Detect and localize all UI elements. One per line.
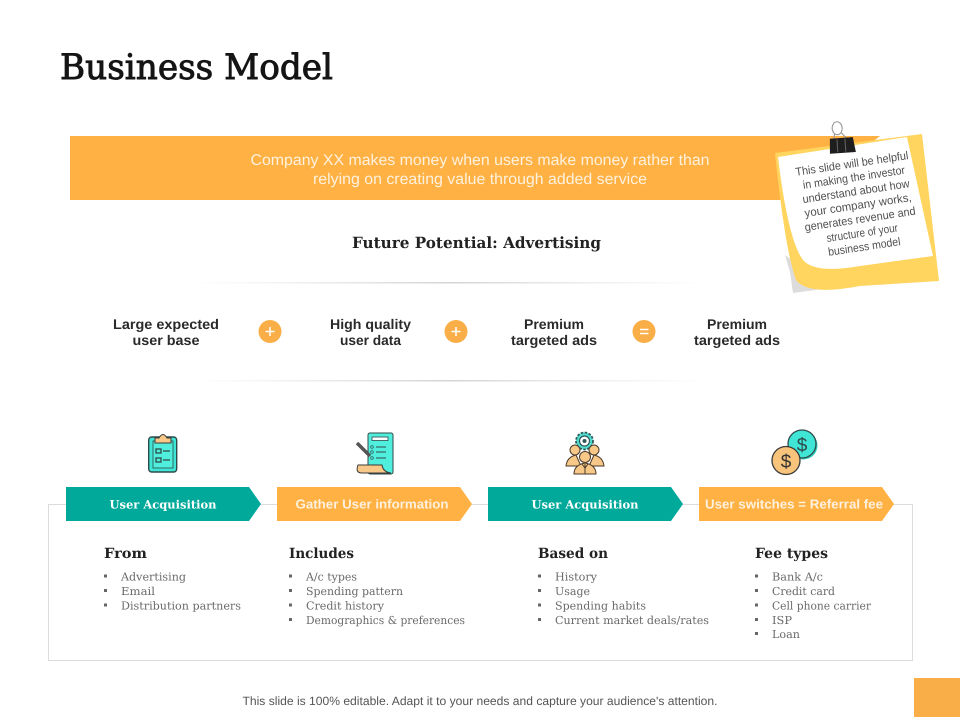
footer note: This slide is 100% editable. Adapt it to your needs and capture your audience's attention. (242, 694, 718, 708)
icon: clipboard (149, 434, 177, 472)
column: based on: Spending habits (555, 600, 646, 612)
arrow: user switches referral fee: User switches = Referral fee (705, 496, 883, 512)
column: from: Distribution partners (121, 600, 241, 612)
upper divider (190, 282, 710, 284)
icon: dollar coins (772, 430, 818, 474)
arrow: user acquisition: User Acquisition (532, 498, 639, 512)
column: based on: Usage (555, 585, 590, 598)
term: large expected user base (113, 316, 219, 348)
column: fee types: Bank A/c (772, 570, 823, 584)
column: based on: Based on (538, 546, 608, 562)
term: high quality user data: High quality (330, 316, 411, 332)
column: includes: Credit history (306, 600, 385, 612)
column: includes: Spending pattern (306, 585, 403, 598)
lower divider (190, 380, 710, 382)
column: based on: Current market deals/rates (555, 614, 709, 627)
icon: document and pen (357, 433, 393, 474)
sticky note: business model (827, 236, 901, 259)
column: includes: Demographics & preferences (306, 614, 465, 627)
sticky note: structure of your (826, 222, 899, 245)
column: fee types: Fee types (755, 546, 828, 562)
term: high quality user data (330, 316, 411, 348)
sticky note: in making the investor (802, 165, 906, 192)
column: fee types (755, 546, 872, 641)
term: result premium targeted ads: Premium (707, 316, 767, 332)
term: premium targeted ads: Premium (524, 316, 584, 332)
sticky note: understand about how (802, 178, 911, 206)
banner (70, 136, 880, 200)
column: includes: A/c types (305, 570, 357, 584)
column: from: Email (121, 585, 156, 598)
icon: dollar coins: $ (781, 452, 792, 472)
column: from: Advertising (120, 570, 186, 584)
column: fee types: Credit card (772, 585, 835, 598)
plus icon (444, 320, 468, 343)
arrow: gather user information (277, 487, 472, 521)
sticky note (775, 121, 939, 293)
arrow: user acquisition: User Acquisition (110, 498, 217, 512)
term: premium targeted ads: targeted ads (511, 332, 597, 348)
column: fee types: Loan (772, 628, 800, 641)
equation row (113, 316, 780, 348)
arrow: user switches referral fee (699, 487, 894, 521)
equals icon (632, 320, 656, 343)
sticky note: generates revenue and (804, 206, 916, 234)
arrow: user acquisition (488, 487, 683, 521)
content panel (48, 504, 912, 660)
sticky note: your company works, (804, 192, 912, 220)
column: includes: Includes (289, 546, 354, 562)
banner: relying on creating value through added service (313, 171, 647, 188)
column: fee types: ISP (772, 614, 793, 627)
term: result premium targeted ads: targeted ads (694, 332, 780, 348)
plus icon (258, 320, 282, 343)
column: includes (289, 546, 465, 627)
term: large expected user base: user base (132, 332, 200, 348)
icon: team and gear (566, 432, 604, 474)
column: from: From (104, 546, 147, 562)
title: Business Model (60, 48, 333, 88)
term: result premium targeted ads (694, 316, 780, 348)
column: based on (538, 546, 709, 627)
corner block (914, 678, 960, 717)
binder clip (828, 121, 856, 154)
arrow: gather user information: Gather User information (296, 496, 449, 512)
term: premium targeted ads (511, 316, 597, 348)
term: high quality user data: user data (340, 332, 401, 348)
sticky note: This slide will be helpful (795, 150, 909, 179)
icon: dollar coins: $ (797, 435, 808, 456)
term: large expected user base: Large expected (113, 316, 219, 332)
column: based on: History (555, 570, 598, 584)
banner: Company XX makes money when users make money rather than (250, 152, 710, 169)
arrow: user acquisition (66, 487, 261, 521)
column: fee types: Cell phone carrier (772, 600, 872, 612)
column: from (104, 546, 241, 612)
subheading: Future Potential: Advertising (352, 233, 601, 252)
